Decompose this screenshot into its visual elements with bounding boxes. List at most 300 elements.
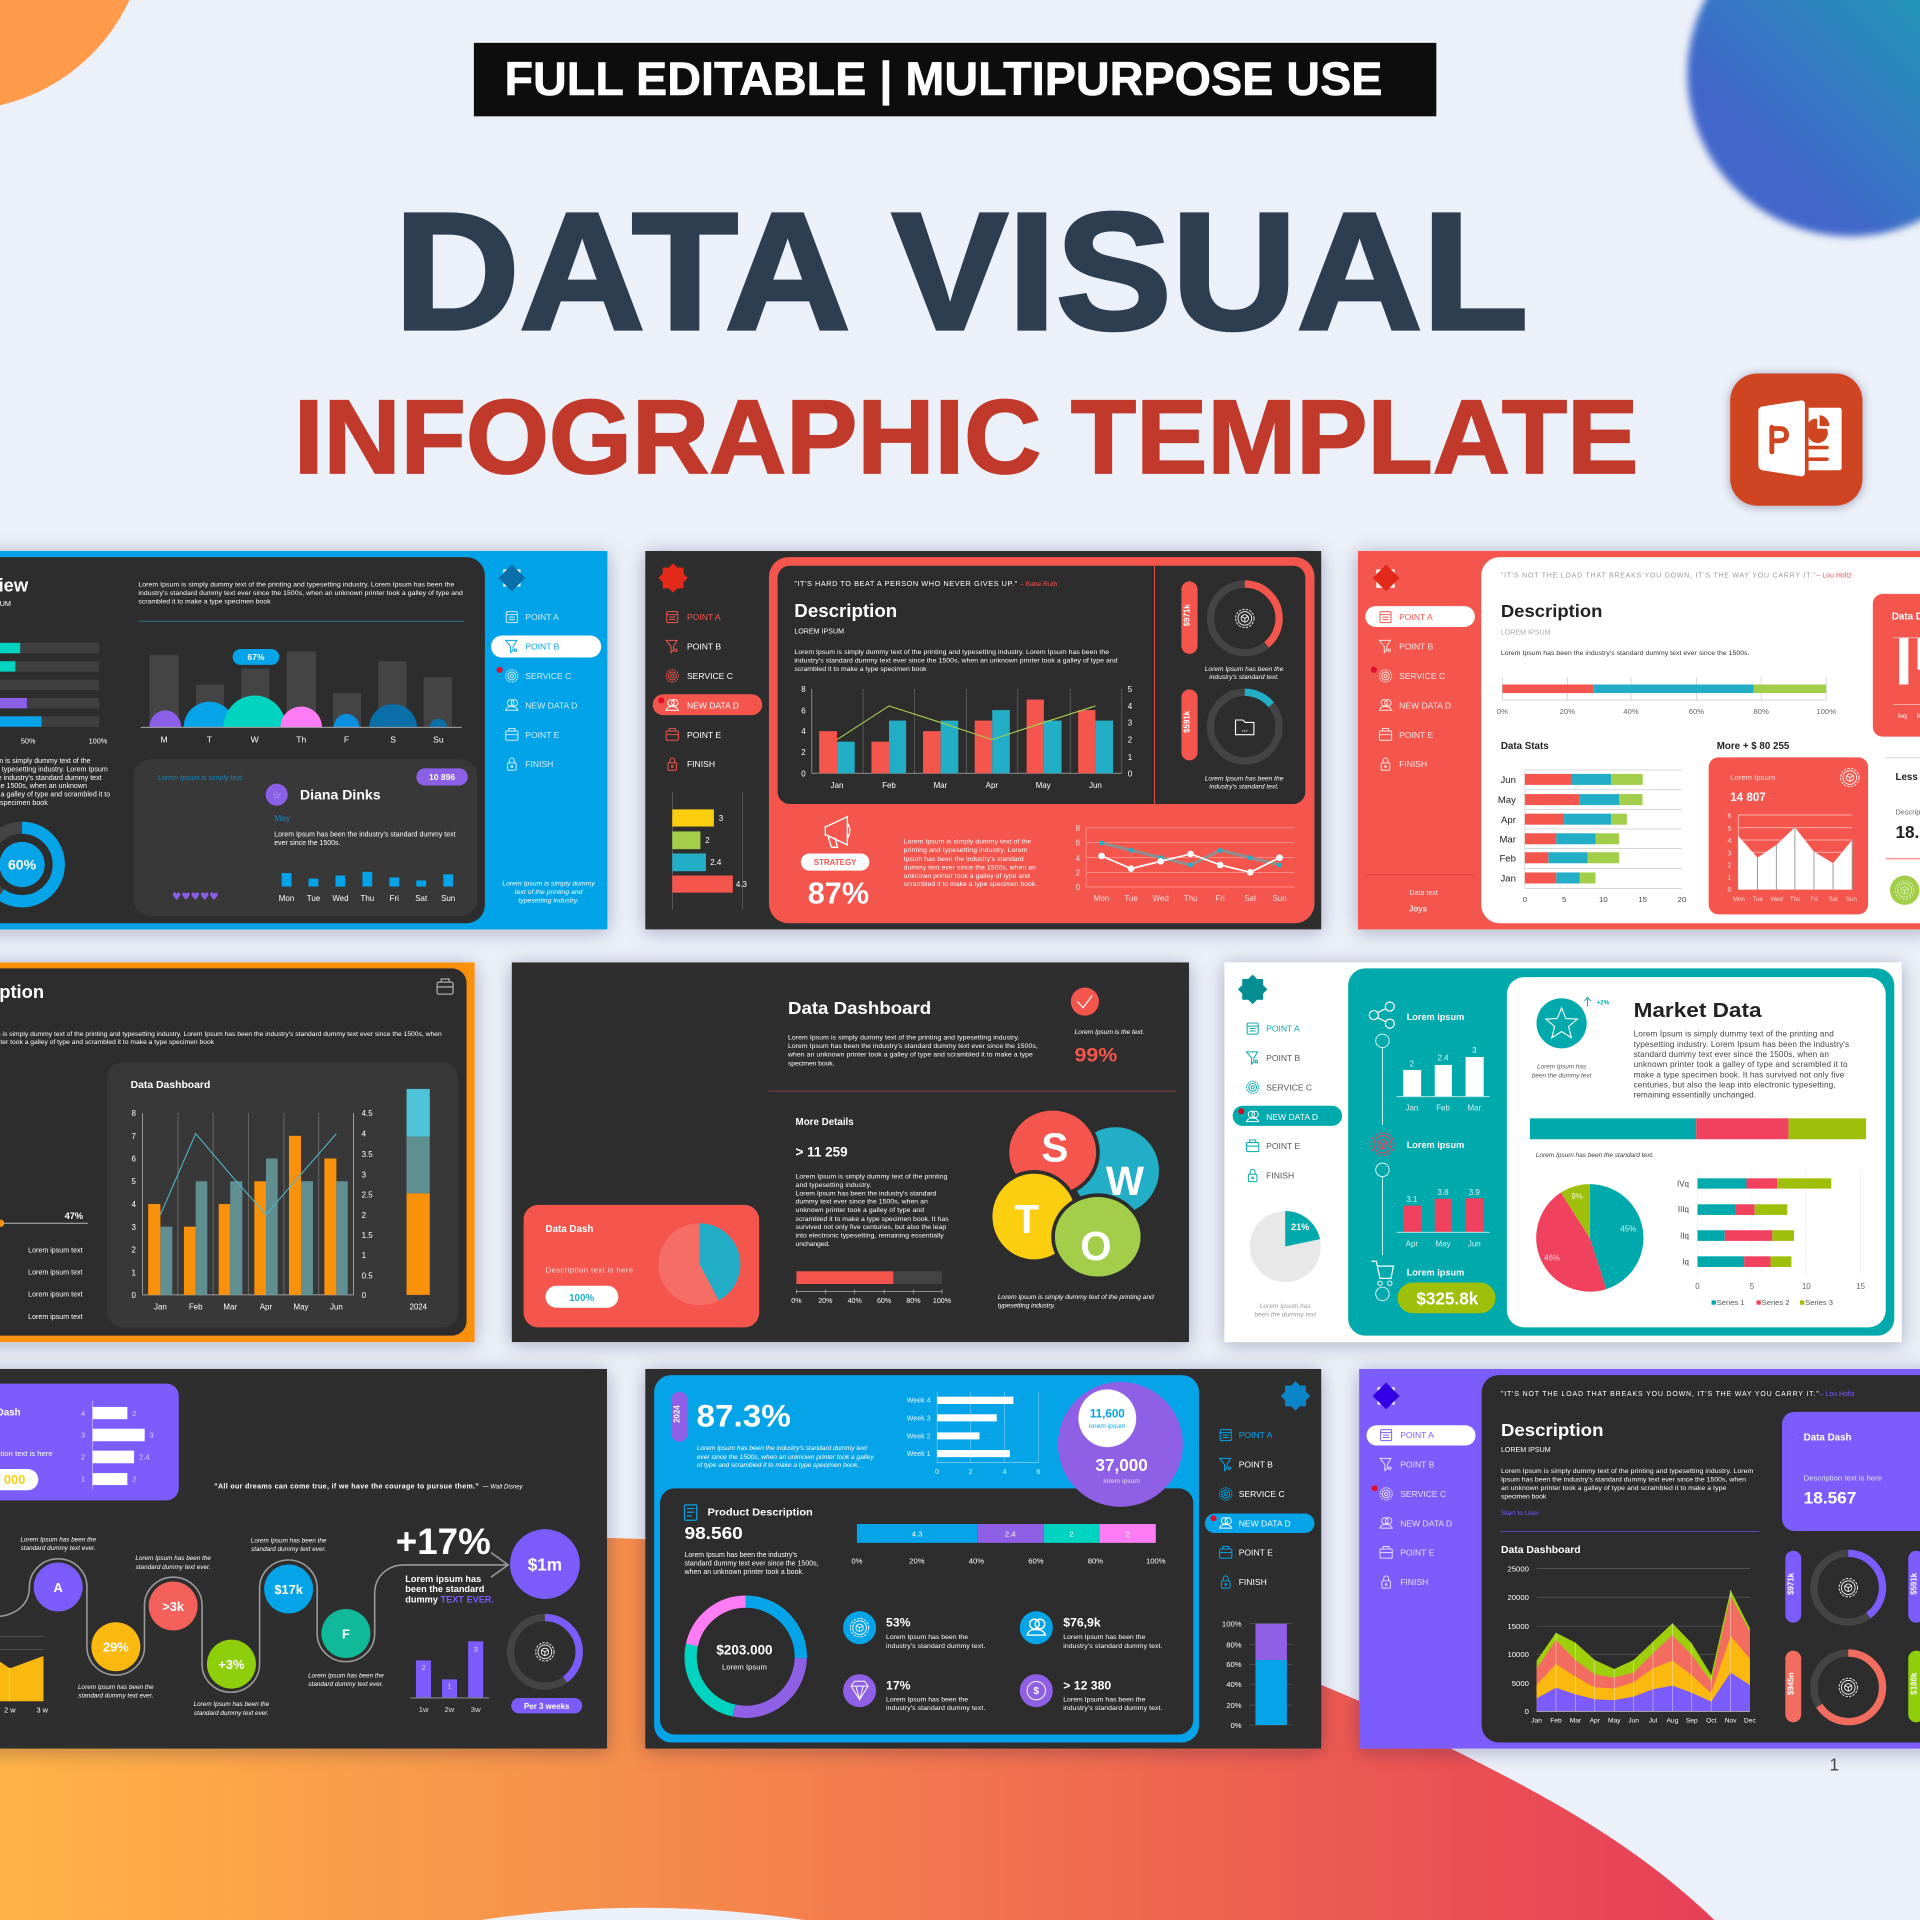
sidebar navigation: POINT B [687, 642, 721, 652]
text block: dummy text ever since the 1500s, when an [904, 864, 1036, 871]
line chart: Fri [1216, 894, 1225, 903]
combo chart [801, 685, 1133, 790]
card: 14 807: Lorem Ipsum [1730, 773, 1775, 782]
area chart: Oct [1706, 1717, 1717, 1724]
sidebar navigation: POINT A [1399, 612, 1433, 622]
column chart with bubbles: 67% [247, 652, 265, 662]
column chart [410, 1641, 489, 1714]
callout text [405, 1574, 494, 1604]
profile card: Lorem Ipsum is simply text. [158, 774, 244, 782]
column chart: jan to mar: Mar [1467, 1104, 1481, 1113]
milestone circles [34, 1562, 370, 1689]
sidebar navigation: POINT E [1239, 1548, 1273, 1558]
teal column [1348, 968, 1894, 1336]
sidebar navigation [653, 612, 762, 770]
line chart [1076, 824, 1294, 903]
card: purple data dash [0, 1384, 179, 1500]
combo chart: 4 [1128, 702, 1133, 711]
column chart: apr to jun: Jun [1468, 1240, 1481, 1249]
icon: check [1071, 988, 1099, 1016]
card: purple data dash: 2.4 [139, 1453, 150, 1462]
sidebar navigation: POINT A [1400, 1430, 1434, 1440]
text block: unknown printer took a galley of type and [904, 873, 1030, 880]
horizontal bar chart: 2.4 [710, 858, 722, 867]
stacked column chart [1222, 1619, 1292, 1730]
card: data dashboard chart: Data Dashboard [131, 1080, 210, 1091]
text block [787, 1035, 1038, 1067]
white content card [1507, 977, 1886, 1327]
stat item: 53%: Lorem Ipsum has been the [886, 1634, 968, 1641]
stacked horizontal bar chart: IVq [1677, 1180, 1689, 1189]
card: 14 807: Sun [1846, 896, 1857, 903]
stacked horizontal bar chart [1498, 770, 1686, 904]
card: data dash: Description text is here [1804, 1473, 1882, 1482]
text block: when an unknown printer took a galley of type and scrambled it to make a type [787, 1052, 1033, 1059]
donut: $971k [1181, 581, 1284, 681]
text block: specimen book [1501, 1494, 1547, 1501]
donut: $971k: Lorem Ipsum has been the [1205, 666, 1284, 673]
sidebar navigation: NEW DATA D [1266, 1112, 1318, 1122]
card: data dash pie: Description text is here [546, 1265, 633, 1274]
column chart: 2 [422, 1663, 426, 1672]
stacked horizontal bar chart: 0 [1523, 895, 1527, 904]
text block: unknown printer took a galley of type and [796, 1207, 924, 1214]
column chart: 2w [444, 1705, 455, 1714]
horizontal bar chart: 4.3 [736, 880, 748, 889]
text block: Ipsum has been the industry's standard [904, 856, 1024, 863]
area chart: Feb [1550, 1717, 1562, 1724]
text block: Lorem Ipsum is simply dummy text of the printing and typesetting industry. [788, 1035, 1019, 1042]
card: purple data dash: 2 [81, 1453, 85, 1462]
sidebar footer [1365, 874, 1475, 914]
profile card: Mon [279, 894, 294, 903]
swot diagram: T [1014, 1196, 1039, 1242]
pie chart: 9% [1571, 1192, 1583, 1201]
milestone captions: standard dummy text ever. [308, 1681, 383, 1688]
area chart: Aug [1667, 1717, 1679, 1724]
stacked bar [851, 1524, 1166, 1566]
milestone captions: standard dummy text ever. [21, 1545, 96, 1552]
text list [28, 1247, 83, 1321]
stacked horizontal bar chart [1677, 1169, 1866, 1307]
horizontal bar chart: 3 [719, 814, 724, 823]
quote: "IT'S HARD TO BEAT A PERSON WHO NEVER GIVES UP." [794, 579, 1018, 588]
text block: industry's standard dummy text ever since the 1500s, when an unknown printer took a galley of type and [794, 657, 1118, 664]
heading: more details: More Details [796, 1117, 854, 1128]
combo chart: 3 [1128, 719, 1133, 728]
stacked bar: 60% [1028, 1557, 1044, 1566]
line chart: 0 [1076, 883, 1081, 892]
milestone captions: Lorem Ipsum has been the [78, 1684, 154, 1691]
stacked horizontal bar chart: May [1498, 795, 1516, 806]
card: 14 807: 6 [1727, 812, 1731, 820]
card: 14 807: Mon [1733, 896, 1745, 903]
sidebar navigation: POINT B [1400, 1460, 1435, 1470]
text block: scrambled it to make a type specimen book [138, 599, 271, 606]
donut: $945n: $945n [1786, 1672, 1795, 1695]
sidebar note: typesetting industry. [518, 897, 579, 904]
sidebar navigation [491, 612, 601, 770]
horizontal bar chart [672, 792, 748, 910]
stacked horizontal bar chart: Apr [1501, 815, 1517, 826]
line chart: 2 [1076, 869, 1081, 878]
card: data dash cropped [1873, 594, 1920, 737]
stacked bar: 80% [1088, 1557, 1103, 1566]
sidebar navigation: NEW DATA D [687, 700, 739, 710]
card: data dash pie [524, 1205, 759, 1327]
card: data dashboard chart: May [293, 1302, 309, 1311]
subheading: LOREM IPSUM [1501, 628, 1551, 636]
panel: dark and coral description dashboard [645, 551, 1321, 929]
sidebar navigation: POINT B [1239, 1460, 1273, 1470]
page number: 1 [1830, 1755, 1839, 1775]
stacked progress bar: 60% [1689, 707, 1704, 716]
column chart: apr to jun [1397, 1188, 1490, 1249]
donut: $971k [1785, 1551, 1883, 1623]
sidebar navigation [1233, 1023, 1342, 1182]
sidebar note [502, 880, 595, 904]
profile card: Fri [390, 894, 399, 903]
stacked bar: 0% [851, 1557, 863, 1566]
sidebar navigation: NEW DATA D [1399, 700, 1451, 710]
yellow area chart: 3 w [37, 1705, 49, 1714]
callout text: Lorem ipsum has [405, 1574, 481, 1584]
horizontal bar chart: Week 2 [907, 1433, 931, 1441]
sidebar navigation: FINISH [525, 759, 553, 769]
card: data dashboard chart: 4 [131, 1200, 136, 1209]
top banner: FULL EDITABLE | MULTIPURPOSE USE [504, 52, 1382, 105]
horizontal bar chart: 100% [89, 736, 108, 745]
yellow area chart [0, 1637, 49, 1714]
sidebar navigation: SERVICE C [525, 671, 571, 681]
profile card: ever since the 1500s. [274, 840, 340, 847]
card: 14 807: 14 807 [1730, 791, 1766, 804]
profile card: Tue [307, 894, 321, 903]
stat pill [1398, 1283, 1495, 1313]
icon: logo [1373, 1382, 1400, 1409]
stacked horizontal bar chart: Mar [1499, 834, 1517, 845]
donut: $971k: $971k [1786, 1572, 1795, 1595]
card: data dashboard chart: 8 [131, 1109, 136, 1118]
stacked column chart: 80% [1226, 1640, 1242, 1649]
stacked horizontal bar chart: Feb [1499, 853, 1516, 864]
text block [794, 649, 1118, 673]
yellow area chart: 2 w [4, 1705, 16, 1714]
card: data dashboard chart: 4.5 [362, 1109, 373, 1118]
quote: – Lou Holtz [1817, 572, 1852, 579]
progress bar: 40% [848, 1297, 862, 1305]
line chart: Wed [1153, 894, 1169, 903]
progress bar: 80% [906, 1297, 921, 1305]
horizontal bar chart [907, 1392, 1040, 1476]
icon: star badge: +2% [1597, 1000, 1610, 1007]
donut: $591k: $591k [1183, 710, 1192, 733]
dark inner card [660, 1488, 1193, 1734]
milestone circles: >3k [162, 1599, 185, 1614]
text list: Lorem ipsum text [28, 1313, 83, 1321]
progress bar: 60% [877, 1297, 892, 1305]
stat item: $76,9k: $76,9k [1063, 1616, 1101, 1630]
panel: purple description dashboard [1359, 1369, 1920, 1749]
text block: Lorem Ipsum has been the industry's standard dummy text ever since the 1500s, [788, 1043, 1038, 1050]
sidebar navigation: FINISH [1399, 759, 1427, 769]
icon: logo [658, 563, 688, 593]
card: 14 807: 0 [1727, 886, 1731, 894]
stacked progress bar: 100% [1816, 707, 1836, 716]
horizontal bar chart [0, 643, 108, 745]
combo chart: 6 [801, 706, 806, 715]
stacked horizontal bar chart: 20 [1678, 895, 1686, 904]
combo chart: 4 [801, 727, 806, 736]
purple stats circle: lorem ipsum [1103, 1478, 1140, 1485]
column chart: 3 [474, 1645, 478, 1654]
area chart: Nov [1725, 1717, 1737, 1724]
column chart with bubbles: S [390, 735, 396, 745]
stacked horizontal bar chart: 15 [1856, 1282, 1866, 1291]
subtitle: INFOGRAPHIC TEMPLATE [294, 379, 1638, 496]
card: purple data dash: 2 [132, 1409, 137, 1418]
column chart: apr to jun: May [1436, 1240, 1451, 1249]
profile card: ♥♥♥♥♥ [172, 891, 219, 903]
area chart: 20000 [1507, 1593, 1529, 1602]
card: data dashboard chart: 5 [131, 1177, 136, 1186]
stat: 98.560: 98.560 [684, 1523, 743, 1543]
horizontal bar chart: 6 [1036, 1468, 1040, 1476]
stacked horizontal bar chart: Iq [1682, 1257, 1689, 1266]
stacked progress bar [1497, 677, 1836, 716]
card: data dashboard chart: Jan [154, 1302, 167, 1311]
area chart: Jul [1649, 1717, 1658, 1724]
sidebar navigation: POINT A [525, 612, 559, 622]
stacked progress bar: 0% [1497, 707, 1508, 716]
pill: $188k: $188k [1909, 1672, 1918, 1695]
text block: make a type specimen book. It has survived not only five [1634, 1070, 1845, 1079]
card: data dashboard chart: 3 [362, 1170, 367, 1179]
stat item: 17%: Lorem Ipsum has been the [886, 1696, 968, 1703]
text block: Lorem Ipsum is simply dummy text of the printing and typesetting industry. Lorem [1501, 1468, 1754, 1475]
strategy pill [801, 853, 869, 871]
icon: megaphone [825, 817, 850, 847]
stacked progress bar: 80% [1753, 707, 1769, 716]
stacked column chart: 100% [1222, 1619, 1242, 1628]
stat: 99% [1074, 1029, 1144, 1067]
sidebar navigation: SERVICE C [1266, 1082, 1312, 1092]
milestone captions: Lorem Ipsum has been the [20, 1537, 96, 1544]
combo chart: 8 [801, 685, 806, 694]
profile card: Sat [415, 894, 428, 903]
stat: +17%: +17% [396, 1521, 491, 1562]
profile card: May [274, 813, 291, 823]
horizontal bar chart: 0 [935, 1468, 939, 1476]
text block [904, 839, 1037, 888]
combo chart: 0 [1128, 769, 1133, 778]
card: data dashboard chart: Feb [189, 1302, 203, 1311]
combo chart: Jun [1089, 781, 1102, 790]
donut chart: Lorem Ipsum [722, 1663, 767, 1672]
text block: Lorem Ipsum is simply dummy text of the printing and typesetting industry. Lorem Ipsum has been the [794, 649, 1109, 656]
card: data dashboard chart: 0.5 [362, 1271, 373, 1280]
heading: description: Description [1501, 1420, 1603, 1440]
card: purple data dash: 3 [81, 1431, 85, 1440]
icon: briefcase [437, 979, 453, 994]
milestone captions: standard dummy text ever. [136, 1564, 211, 1571]
stat item: 17% [843, 1674, 985, 1712]
sidebar navigation: NEW DATA D [1400, 1518, 1452, 1528]
text block: Lorem Ipsum is simply dummy text of the printing and typesetting industry. Lorem Ipsum has been the [138, 582, 454, 589]
line chart: 8 [1076, 824, 1081, 833]
stacked bar: 4.3 [912, 1529, 923, 1538]
card: data dashboard chart: 0 [362, 1291, 367, 1300]
card: 14 807: 4 [1727, 837, 1731, 845]
card: 14 807: Sat [1828, 896, 1838, 903]
card: 14 807 [1709, 757, 1868, 914]
text block: printing and typesetting industry. Lorem [904, 847, 1028, 854]
stat: 87%: 87% [808, 877, 869, 911]
column chart with bubbles: T [207, 735, 213, 745]
text block: standard dummy text ever since the 1500s, when an [1634, 1050, 1829, 1059]
card: purple data dash: 3 [149, 1431, 154, 1440]
card: data dashboard chart: Mar [223, 1302, 237, 1311]
area chart: Mar [1570, 1717, 1582, 1724]
area chart: Apr [1590, 1717, 1601, 1724]
stacked bar [1530, 1118, 1866, 1139]
combo chart: 5 [1128, 685, 1133, 694]
text block: specimen book. [788, 1060, 835, 1067]
text block: Ipsum has been the industry's standard dummy text ever since the 1500s, when [1501, 1477, 1746, 1484]
sidebar navigation [1365, 606, 1475, 770]
stat item: $76,9k: industry's standard dummy text. [1063, 1643, 1163, 1650]
combo chart: 0 [801, 769, 806, 778]
text block: an unknown printer took a galley of type and scrambled it to make a type [1501, 1485, 1726, 1492]
sidebar navigation: SERVICE C [1239, 1489, 1285, 1499]
icon: document [684, 1505, 697, 1520]
sidebar navigation: POINT A [1266, 1024, 1300, 1034]
pill: $591k [1908, 1551, 1920, 1623]
profile card [133, 759, 478, 916]
quote: "IT'S NOT THE LOAD THAT BREAKS YOU DOWN, IT'S THE WAY YOU CARRY IT." [1501, 1391, 1819, 1398]
milestone circles: A [54, 1580, 63, 1595]
callout text: been the standard [405, 1584, 484, 1594]
area chart: May [1608, 1717, 1621, 1724]
pill: $591k: $591k [1909, 1572, 1918, 1595]
stacked column chart: 60% [1226, 1660, 1242, 1669]
card: purple data dash: 1 [81, 1475, 85, 1484]
profile card: Lorem Ipsum has been the industry's standard dummy text [274, 831, 456, 838]
stat item: $76,9k [1020, 1611, 1163, 1650]
timeline: Lorem ipsum [1407, 1267, 1464, 1277]
card: data dashboard chart [107, 1063, 458, 1327]
column chart with bubbles: M [161, 735, 168, 745]
milestone circles: F [342, 1626, 350, 1641]
stat item: $76,9k: Lorem Ipsum has been the [1063, 1634, 1145, 1641]
stacked horizontal bar chart: 5 [1562, 895, 1566, 904]
combo chart: 2 [1128, 736, 1133, 745]
area chart: 5000 [1512, 1679, 1529, 1688]
sidebar navigation: POINT E [687, 730, 721, 740]
card: data dashboard chart: 6 [131, 1154, 136, 1163]
swot diagram: S [1041, 1125, 1068, 1171]
profile card: Sun [441, 894, 455, 903]
donut: $971k: $971k [1183, 604, 1192, 626]
horizontal bar chart: 2 [969, 1468, 973, 1476]
line chart: Tue [1124, 894, 1138, 903]
panel: dark data dashboard with swot [512, 962, 1189, 1342]
decorative orange circle top left [0, 0, 147, 110]
timeline [1369, 1002, 1464, 1301]
title: DATA VISUAL [394, 179, 1528, 365]
stacked bar: 100% [1146, 1557, 1166, 1566]
line chart: 4 [1076, 854, 1081, 863]
text block: Lorem Ipsum is simply dummy text of the [904, 839, 1031, 846]
column chart with bubbles: Su [433, 735, 444, 745]
column chart: 1w [419, 1705, 429, 1714]
text block: when an unknown printer took a book. [683, 1569, 804, 1576]
text block [697, 1445, 874, 1469]
swot caption: typesetting industry. [998, 1303, 1055, 1310]
milestone captions: Lorem Ipsum has been the [251, 1537, 327, 1544]
column chart: jan to mar: 3 [1472, 1046, 1477, 1055]
text block: scrambled it to make a type specimen book. [904, 881, 1037, 888]
donut chart 60%: 60% [8, 856, 37, 872]
text block: survived not only five centuries, but also the leap [796, 1224, 946, 1231]
stacked horizontal bar chart: Series 1 [1717, 1298, 1745, 1307]
text block: industry's standard dummy text ever since the 1500s, when an unknown printer took a galley of type and [138, 590, 463, 597]
card: data dashboard chart: 4 [362, 1130, 367, 1139]
text block: ever since the 1500s, when an unknown printer took a galley [697, 1454, 874, 1461]
column chart: jan to mar: 2.4 [1438, 1053, 1449, 1062]
quote: – Lou Holtz [1820, 1391, 1855, 1398]
column chart: 1 [447, 1682, 452, 1691]
stacked horizontal bar chart: Series 2 [1762, 1298, 1789, 1307]
white blob at bottom edge [481, 1908, 804, 1920]
profile card: Diana Dinks [300, 787, 381, 803]
strategy pill: STRATEGY [814, 858, 857, 867]
area chart [1507, 1564, 1756, 1724]
area chart: 25000 [1507, 1564, 1529, 1573]
stacked horizontal bar chart: IIIq [1678, 1205, 1689, 1214]
subheading: LOREM IPSUM [1501, 1446, 1551, 1454]
donut: $591k [1181, 689, 1284, 791]
card: data dashboard chart: 1 [131, 1268, 136, 1277]
line chart: Mon [1094, 894, 1109, 903]
card: data dash pie: Data Dash [546, 1224, 593, 1235]
quote: "IT'S NOT THE LOAD THAT BREAKS YOU DOWN, IT'S THE WAY YOU CARRY IT." [1501, 572, 1816, 579]
decorative blue gradient circle top right [1687, 0, 1920, 236]
pie chart [1536, 1184, 1643, 1292]
timeline: Lorem ipsum [1407, 1012, 1464, 1022]
card: 14 807: Tue [1753, 896, 1764, 903]
text list: Lorem ipsum text [28, 1269, 83, 1277]
area chart: Jun [1628, 1717, 1639, 1724]
pie chart: 45% [1620, 1224, 1636, 1233]
timeline: Lorem ipsum [1407, 1140, 1464, 1150]
text block: Lorem Ipsum has been the industry's standard [796, 1190, 937, 1197]
text block: unchanged. [796, 1241, 830, 1248]
sidebar navigation: POINT E [525, 730, 560, 740]
panel: orange description dashboard [0, 962, 475, 1342]
sidebar navigation: SERVICE C [1399, 671, 1445, 681]
pill: 2024 [671, 1392, 688, 1442]
donut: $591k: industry's standard text. [1209, 784, 1279, 791]
stacked column chart: 0% [1230, 1721, 1242, 1730]
horizontal bar chart: 4 [1003, 1468, 1007, 1476]
text block [1501, 1468, 1754, 1501]
text block: standard dummy text ever since the 1500s, [684, 1561, 819, 1568]
stat item: 17%: industry's standard dummy text. [886, 1705, 985, 1712]
text block: Lorem Ipsum is simply dummy text of the printing and [1634, 1030, 1834, 1039]
stacked progress bar: 20% [1560, 707, 1575, 716]
text block: scrambled it to make a type specimen book [794, 666, 927, 673]
